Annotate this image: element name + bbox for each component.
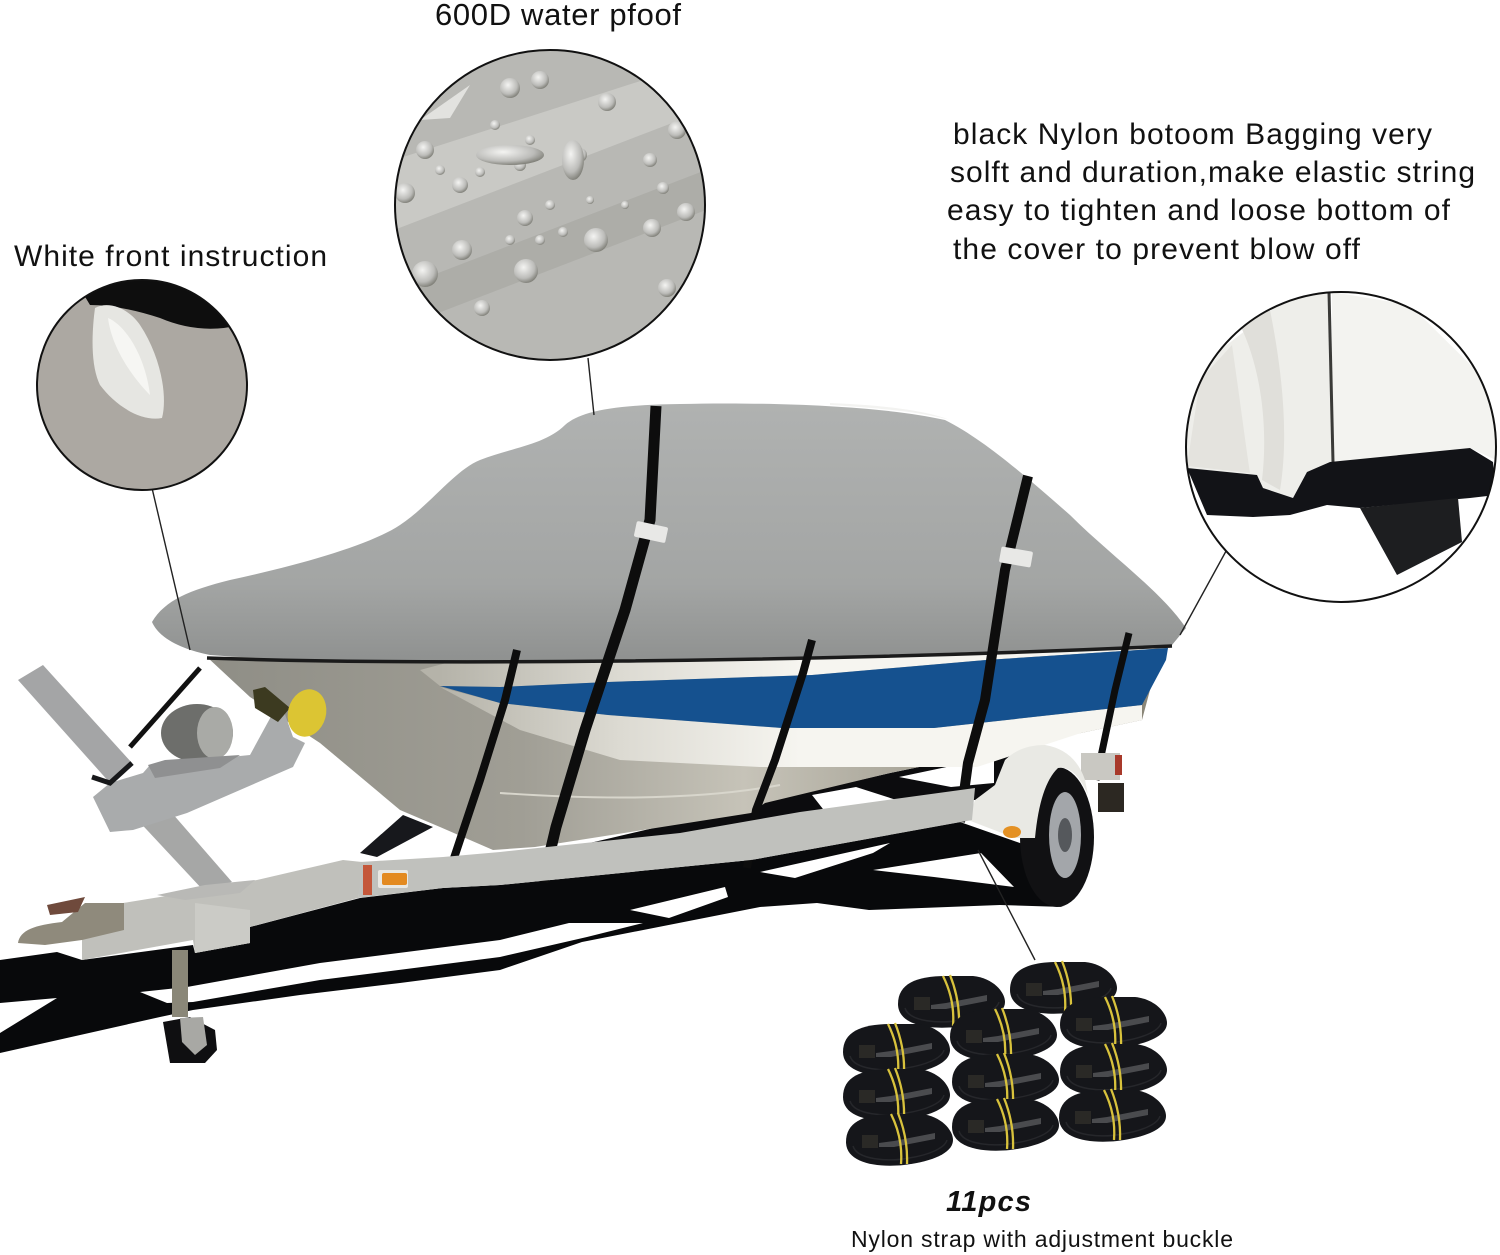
main strap 2 [960, 476, 1028, 822]
upright collar [92, 763, 132, 783]
black hem band [1187, 448, 1496, 517]
winch [161, 704, 233, 762]
callout: bottom bagging: the cover to prevent blow off [953, 233, 1361, 266]
hull shadow above rail [560, 747, 1020, 860]
callout: front instruction: White front instruction [14, 240, 327, 273]
fender light [1003, 826, 1021, 838]
callout: bottom bagging: black Nylon botoom Bagging very [953, 118, 1432, 151]
rim [1049, 792, 1081, 878]
strap clips [634, 521, 668, 543]
callout: bottom bagging: solft and duration,make elastic string [950, 156, 1475, 189]
callout: bottom bagging: easy to tighten and loose bottom of [947, 194, 1451, 227]
winch base [148, 755, 240, 778]
cover [152, 403, 1186, 661]
cover top highlight [830, 403, 950, 420]
circle outline: hem [1186, 292, 1496, 602]
left fold shading [1240, 310, 1284, 490]
bow roller bracket [253, 687, 290, 722]
callout: bottom bagging [947, 118, 1475, 266]
side strap 3 [1096, 633, 1129, 780]
ground shadow under trailer [0, 822, 1064, 1053]
rear bracket [1098, 783, 1124, 812]
white upper band [420, 648, 1168, 687]
strut behind bow [360, 815, 433, 857]
seam [1329, 292, 1333, 462]
detail circle: water drops on fabric [394, 50, 706, 362]
mast foot [157, 880, 255, 900]
strap count: 11pcs [946, 1186, 1031, 1218]
cover hem [207, 646, 1172, 662]
tire [1020, 767, 1094, 907]
hull chine highlights [500, 785, 780, 798]
fender [968, 745, 1092, 838]
circle outline: fabric [395, 50, 705, 360]
side rail [358, 788, 975, 898]
blue stripe [440, 648, 1168, 728]
bow tie-down [130, 668, 200, 747]
white hull band [440, 687, 1142, 767]
trailer [18, 665, 1124, 1063]
hull [207, 648, 1168, 850]
webbing flap [1360, 498, 1462, 575]
rail plate [195, 903, 250, 953]
right fabric [1332, 292, 1496, 464]
leader lines [152, 358, 1242, 960]
main strap 1 [543, 406, 656, 882]
left fabric [1186, 292, 1332, 498]
strap caption: Nylon strap with adjustment buckle [851, 1226, 1233, 1252]
winch stand [93, 700, 305, 832]
jack post [172, 950, 188, 1017]
coupler [18, 903, 124, 945]
detail circle: black bottom hem [1186, 292, 1496, 602]
side strap 1 [445, 650, 517, 885]
detail circle: white front instruction [36, 280, 248, 490]
orange marker [378, 870, 408, 888]
red reflector [363, 865, 372, 895]
jack wheel [163, 1017, 217, 1063]
boat [152, 403, 1186, 885]
tongue rail [82, 860, 362, 960]
tongue upright [18, 665, 132, 783]
side strap 2 [747, 640, 812, 868]
strap bundles [843, 961, 1167, 1166]
circle outline: front [37, 280, 247, 490]
tongue mast [133, 805, 232, 890]
bow roller [282, 685, 332, 741]
